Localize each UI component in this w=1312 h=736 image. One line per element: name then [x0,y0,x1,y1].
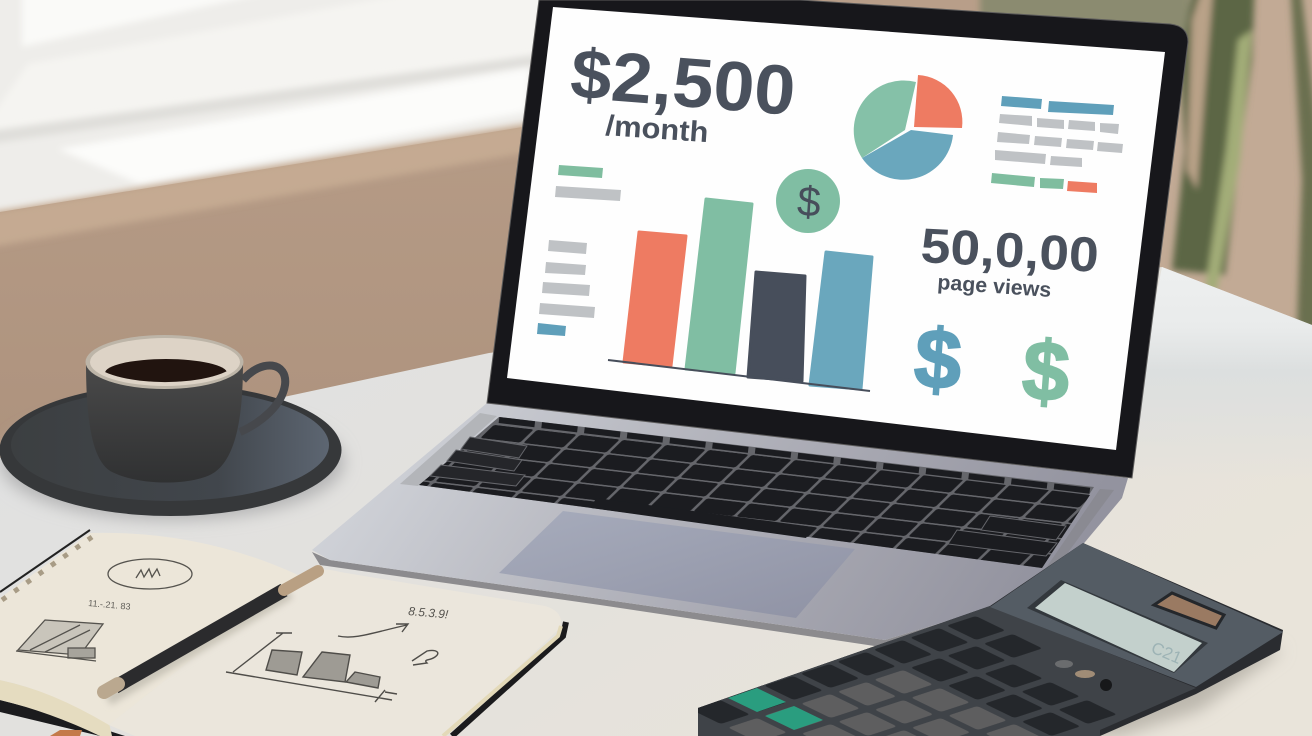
laptop [312,0,1188,648]
label: page views: page views [937,271,1052,302]
left page [0,533,298,725]
right page sketch: bar chart and arrow [226,624,438,702]
left speaker grille [400,413,497,486]
blue dollar icon: $ [911,311,965,408]
dollar badge: $ [796,177,822,226]
green dollar icon: $ [1019,323,1073,420]
calculator body [698,543,1283,736]
light and shade on right of desk [1144,267,1312,400]
laptop base [312,403,1128,640]
trackpad [499,511,855,618]
screen [507,7,1165,450]
left page sketch: circle and chart [16,559,192,661]
keyboard [419,417,1094,568]
saucer [0,384,344,520]
slider switch [1055,660,1112,691]
solar panel [1154,593,1224,628]
right page [109,570,561,736]
window and sill [0,0,560,249]
bar chart [608,199,872,391]
calculator display [1027,580,1208,673]
page edge [443,626,561,736]
notebook [0,530,566,736]
page stack left [0,680,112,736]
left page note: 11.-.21. 83 [88,598,131,612]
spiral binding [0,530,92,600]
laptop front lip [312,552,1000,648]
calculator [684,543,1283,736]
plant behind laptop [980,0,1312,335]
wall background [0,0,1312,480]
dollar badge [776,169,840,233]
orange item under notebook [50,730,82,736]
keypad deck [698,606,1196,736]
pie chart [854,75,962,180]
green keys [728,688,823,730]
statistic: page views: 50,0,00 [919,219,1100,283]
calculator keys [684,613,1124,736]
right speaker grille [1046,489,1114,568]
left legend lines [537,165,621,336]
data table [991,96,1123,193]
upper panel [990,543,1283,687]
wall behind plant [990,0,1312,340]
right page note: 8.5.3.9! [408,604,450,622]
notebook cover [0,700,125,736]
screen bezel [487,0,1188,478]
cover right edge [452,622,566,736]
calculator display: C21 [1148,638,1185,668]
desk surface [0,267,1312,736]
calculator shadow [1100,650,1280,736]
pen [104,571,318,700]
label: per month: /month [605,110,709,149]
headline figure: revenue: $2,500 [568,34,798,130]
coffee cup [86,335,285,482]
